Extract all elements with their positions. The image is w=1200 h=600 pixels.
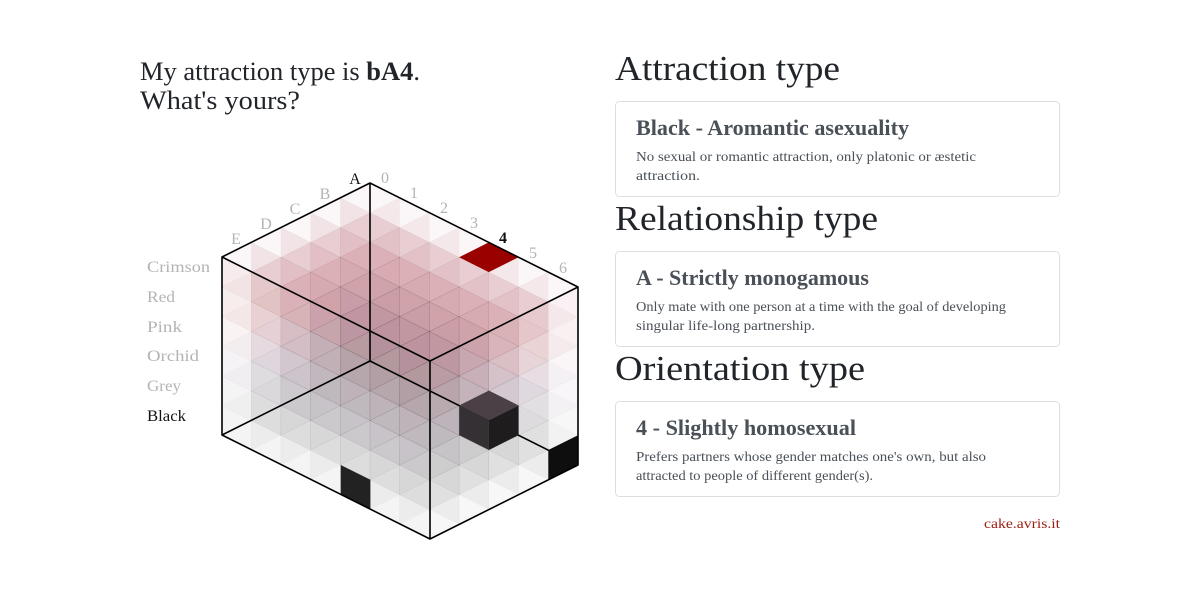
heading: Relationship type (615, 199, 878, 238)
source link: cake.avris.it (984, 517, 1060, 532)
relationship axis labels (231, 171, 361, 248)
title: What's yours? (140, 86, 300, 115)
panel: attraction type (615, 49, 1060, 196)
highlighted dark voxel (459, 391, 519, 450)
card (616, 102, 1060, 196)
orientation axis labels: 6 (559, 260, 567, 277)
relationship axis labels: B (320, 186, 330, 203)
relationship axis labels: A (349, 171, 361, 188)
front cube edges (222, 183, 578, 539)
colour axis labels: Pink (147, 319, 182, 336)
panel: relationship type (615, 199, 1060, 346)
card text (636, 300, 1006, 334)
card (616, 402, 1060, 496)
panel: orientation type (615, 349, 1060, 496)
card title: A - Strictly monogamous (636, 265, 869, 290)
translucent voxel layers (222, 183, 578, 539)
heading: Attraction type (615, 49, 840, 88)
card (616, 252, 1060, 346)
card text: No sexual or romantic attraction, only platonic or æstetic (636, 150, 976, 165)
card text: singular life-long partnership. (636, 319, 815, 334)
highlighted top cell (459, 242, 518, 272)
heading: Orientation type (615, 349, 865, 388)
orientation axis labels: 5 (529, 245, 537, 262)
colour axis labels: Orchid (147, 348, 199, 365)
relationship axis labels: C (290, 201, 300, 218)
colour axis labels: Grey (147, 378, 181, 395)
card text: attracted to people of different gender(s). (636, 469, 873, 484)
highlighted right wall cell (548, 435, 578, 480)
highlighted left wall cell (341, 465, 370, 509)
colour axis labels: Crimson (147, 259, 210, 276)
colour axis labels (147, 259, 210, 425)
card text: Only mate with one person at a time with the goal of developing (636, 300, 1006, 315)
orientation axis labels: 3 (470, 215, 478, 232)
colour axis labels: Red (147, 289, 175, 306)
title (140, 57, 420, 115)
orientation axis labels (381, 170, 567, 277)
back cube edges (222, 183, 578, 465)
card title: 4 - Slightly homosexual (636, 415, 856, 440)
card title: Black - Aromantic asexuality (636, 115, 909, 140)
orientation axis labels: 2 (440, 200, 448, 217)
card text (636, 450, 986, 484)
orientation axis labels: 1 (410, 185, 418, 202)
colour axis labels: Black (147, 408, 186, 425)
card text (636, 150, 976, 184)
relationship axis labels: D (260, 216, 272, 233)
card text: Prefers partners whose gender matches one's own, but also (636, 450, 986, 465)
card text: attraction. (636, 169, 700, 184)
title: My attraction type is bA4. (140, 57, 420, 86)
orientation axis labels: 4 (499, 230, 507, 247)
relationship axis labels: E (231, 231, 241, 248)
orientation axis labels: 0 (381, 170, 389, 187)
isometric cube chart (222, 183, 578, 539)
